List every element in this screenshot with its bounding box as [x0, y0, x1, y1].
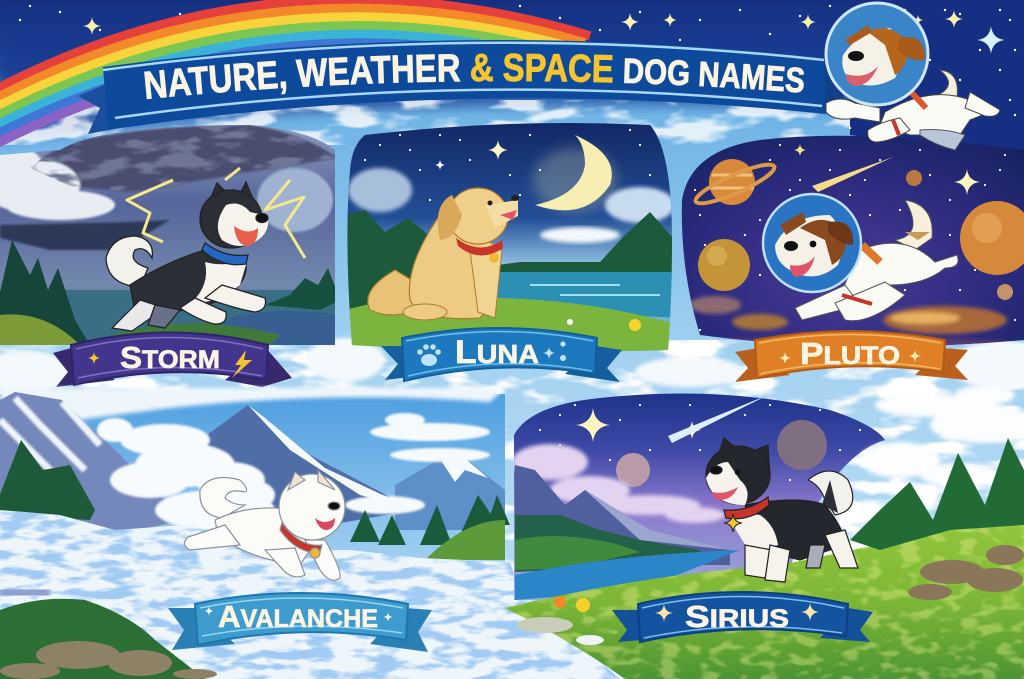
trees, right [350, 495, 510, 545]
sky clouds [345, 413, 490, 514]
panel: Storm [0, 120, 340, 350]
star field across the top [20, 6, 1015, 140]
label: Storm: STORM [120, 340, 220, 375]
clouds [348, 168, 412, 212]
icon: paw [417, 344, 441, 366]
dog: astronaut, Pluto panel [763, 194, 958, 321]
title text: NATURE, WEATHER & SPACE DOG NAMES [144, 53, 804, 100]
tree line [515, 515, 700, 572]
panel: Luna [347, 123, 672, 352]
snow cloud mass [97, 418, 275, 530]
riverside bushes [515, 536, 640, 570]
snow shadow [0, 590, 50, 595]
rainbow [0, 0, 590, 152]
ribbon: Pluto [735, 331, 968, 382]
label: Sirius: SIRIUS [685, 599, 789, 634]
dog: samoyed [184, 470, 345, 580]
lightning bolts [127, 168, 305, 258]
far trees [265, 268, 340, 310]
river [515, 550, 740, 600]
ribbon: Storm [53, 332, 292, 387]
label: Luna: LUNA [455, 334, 539, 370]
planets [616, 420, 827, 487]
title banner [78, 40, 844, 134]
central peak snow [248, 405, 415, 510]
dog: astronaut mascot, top right [826, 3, 1000, 150]
left mountain [0, 392, 185, 540]
lake [490, 272, 680, 318]
ribbon: Avalanche [168, 593, 432, 652]
avalanche snow [0, 510, 620, 679]
mountains [515, 465, 730, 565]
left mountain ridge snow [0, 398, 100, 480]
foreground rocks [0, 641, 217, 679]
planets [698, 170, 1024, 300]
nebula clouds [691, 293, 1012, 346]
foreground bush [0, 599, 205, 679]
dog: Sirius husky [706, 438, 858, 582]
dog: golden retriever [368, 188, 519, 320]
bush, right [425, 520, 505, 560]
ribbon: Luna [381, 328, 622, 382]
ribbon: Sirius [612, 592, 873, 642]
moon [535, 135, 612, 210]
pink clouds [512, 444, 725, 523]
river [0, 290, 335, 340]
grassy bank [110, 324, 280, 345]
storm clouds [0, 125, 338, 250]
forest [345, 210, 675, 320]
comet [812, 157, 893, 192]
right peak [395, 450, 505, 530]
panel: Sirius [514, 394, 885, 600]
label: Pluto: PLUTO [800, 336, 900, 371]
comet [668, 398, 762, 443]
mountain highlight [585, 490, 730, 550]
central peak [200, 405, 415, 530]
panel: Pluto [682, 136, 1024, 346]
big stars [83, 10, 1005, 54]
river water [220, 311, 340, 345]
yellow-green bushes [0, 314, 80, 345]
right peak snow [442, 450, 488, 482]
planet: ringed [694, 159, 776, 206]
panel: Avalanche mountains [0, 388, 620, 679]
trees, left [0, 440, 95, 520]
dog: husky [106, 182, 268, 331]
pine trees [0, 240, 90, 345]
meadow: Sirius foreground [499, 525, 1024, 679]
label: Avalanche: AVALANCHE [218, 599, 378, 634]
right landscape with trees and rocks [850, 385, 1024, 600]
meadow [350, 298, 670, 352]
